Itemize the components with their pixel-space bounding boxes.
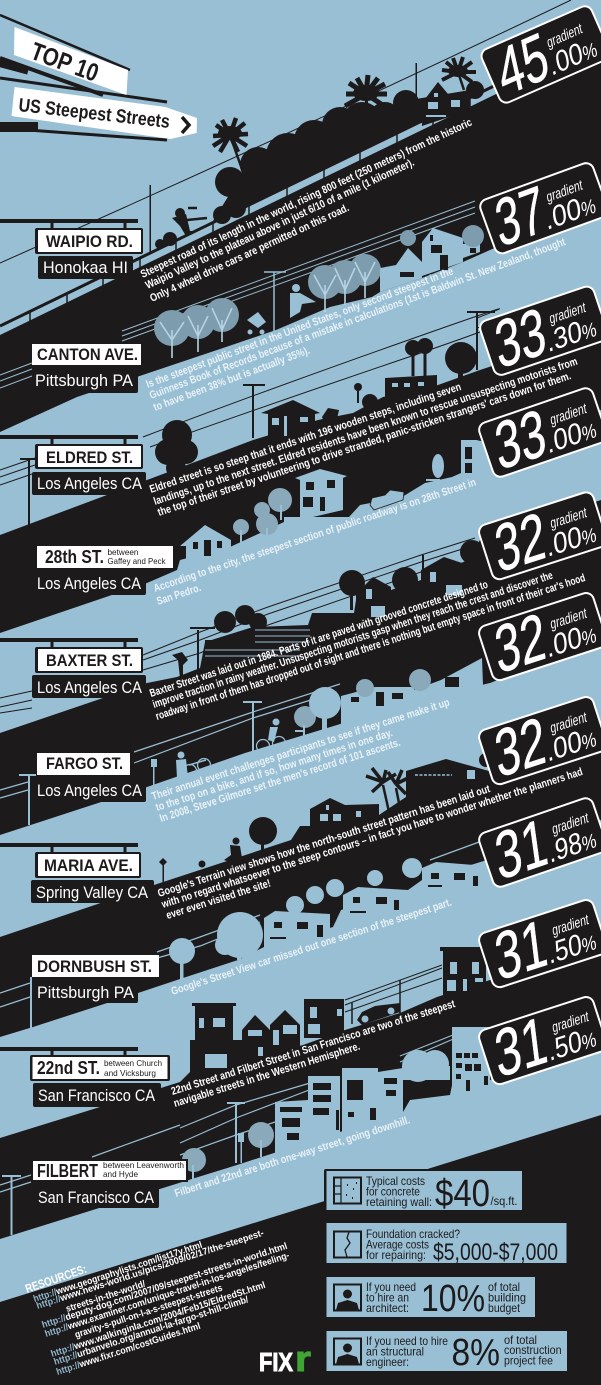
Dornbush house 2 <box>343 887 408 922</box>
panel: structural engineer fee: construction <box>504 1343 562 1357</box>
sign: Canton Ave: Pittsburgh PA <box>35 372 133 390</box>
sign: Eldred St: ELDRED ST. <box>46 449 133 467</box>
sign: Baxter St: BAXTER ST. <box>46 652 133 670</box>
text: Waipio description: Steepest road of its length in the world, rising 800 feet (250 meters) from the historic <box>139 117 474 281</box>
sign: Filbert: between Leavenworth <box>103 1160 184 1170</box>
text: Baxter description: Baxter Street was laid out in 1884. Parts of it are paved with grooved concrete designed to <box>148 579 490 700</box>
gradient badge 33.30%: .30 <box>545 315 584 359</box>
gradient badge 45.00%: .00 <box>546 37 586 83</box>
Canton trees, carriage, girl and houses in blue <box>154 225 484 358</box>
pickup car <box>370 490 404 510</box>
gradient badge 32.00% (Fargo): .00 <box>545 725 584 769</box>
panel: foundation repair cost: for repairing: <box>366 1248 426 1262</box>
sign: Filbert: San Francisco CA <box>38 1189 154 1207</box>
resources list: gravity-s-pull-on-l-a-s-steepest-streets <box>74 1283 224 1341</box>
panel: architect fee: If you need <box>366 1280 416 1294</box>
gradient badge 45.00%: gradient <box>546 21 584 52</box>
Dornbush house 1 <box>264 911 330 952</box>
gradient badge 32.00% (28th): 32 <box>491 498 549 587</box>
tall Victorian house at right <box>440 947 487 997</box>
walker with bike <box>176 752 210 778</box>
text: Canton description: to have been 38% but is actually 35%). <box>152 345 312 414</box>
sports car <box>357 1003 400 1025</box>
gabled house <box>242 1015 270 1062</box>
panel: architect fee: budget <box>488 1301 521 1315</box>
sign: 28th St: 28th ST. <box>45 547 104 567</box>
Waipio house <box>422 82 470 126</box>
panel: structural engineer fee: 8% <box>452 1332 500 1374</box>
text: Waipio description: Waipio Valley to the plateau above in just 6/10 of a mile (1 kilometer). <box>144 157 416 292</box>
sign: 28th St: Gaffey and Peck <box>108 556 166 566</box>
sign: 28th St: Los Angeles CA <box>37 575 141 593</box>
resources list: http://www.fixr.com/costGuides.html <box>55 1321 202 1378</box>
panel: foundation repair cost <box>326 1223 566 1266</box>
Filbert buildings <box>275 1068 403 1153</box>
palm tree middle <box>345 75 387 125</box>
Maria house right <box>406 759 491 805</box>
gradient badge 31.50% (22nd and Filbert): % <box>581 1029 598 1055</box>
right apartment block <box>452 1027 490 1091</box>
Fargo house <box>341 658 483 726</box>
Baxter house lower <box>356 577 391 630</box>
tree <box>249 817 277 852</box>
panel: architect fee: of total <box>488 1280 520 1294</box>
gradient badge 32.00% (Baxter): % <box>581 625 598 651</box>
sign: Canton Ave: CANTON AVE. <box>37 346 138 364</box>
sign: Maria Ave: MARIA AVE. <box>44 857 133 875</box>
Maria silhouettes: lamp, ball, kid, tree, houses and palms <box>159 753 493 885</box>
sign: Fargo St: Los Angeles CA <box>37 782 142 800</box>
gradient badge 32.00% (Baxter): gradient <box>550 605 588 633</box>
gradient badge 31.50% (22nd and Filbert) <box>474 986 601 1093</box>
gradient badge 33.00%: .00 <box>545 417 584 461</box>
resources list: http://www.examiner.com/unique-travel-in-los-angeles/feeling- <box>44 1250 291 1340</box>
lower trees <box>233 488 292 545</box>
icon: engineer <box>334 1338 361 1364</box>
palm tree left <box>213 118 250 192</box>
band: Waipio road and Canton hill <box>0 43 601 432</box>
panel: retaining wall cost: $40 <box>435 1173 490 1215</box>
text: 28th description: According to the city, the steepest section of public roadway is on 28th Street in <box>152 476 478 595</box>
baby carriage <box>247 312 266 334</box>
text: Maria description: Google's Terrain view shows how the north-south street pattern has been laid out <box>156 783 492 900</box>
gradient badge 33.30% <box>475 276 601 383</box>
resources list: http://www.news-world.us/pics/2009/02/17/the-steepest- <box>35 1228 265 1312</box>
Filbert wires, poles, trees and houses in blue <box>0 1027 490 1235</box>
gradient badge 31.98%: 31 <box>491 804 552 894</box>
Baxter silhouettes: trees, houses <box>172 540 484 678</box>
gradient badge 33.00%: 33 <box>491 395 550 484</box>
lollipop tree <box>354 383 362 403</box>
Dornbush house 3 <box>422 862 487 895</box>
band: bottom panel ground <box>0 1115 601 1385</box>
hiker <box>172 208 207 236</box>
panel: architect fee: building <box>488 1290 526 1304</box>
sign: Dornbush St: Pittsburgh PA <box>37 984 134 1002</box>
round tree group <box>215 90 419 206</box>
sign: 22nd St: between Church <box>104 1058 162 1068</box>
scalloped hedges <box>286 858 422 914</box>
sign: Fargo St <box>32 753 146 802</box>
gradient badge 31.98% <box>474 788 601 895</box>
Baxter house upper <box>421 557 468 604</box>
panel: structural engineer fee: engineer: <box>366 1355 409 1369</box>
gradient badge 32.00% (28th): gradient <box>550 505 588 532</box>
sign: 28th St: between <box>108 547 139 557</box>
sign: 22nd St: and Vicksburg <box>104 1068 156 1078</box>
Eldred silhouettes: trees, house, car, building, palms <box>155 338 477 478</box>
flat house <box>304 999 344 1038</box>
sign: Maria Ave: Spring Valley CA <box>36 884 148 902</box>
gradient badge 37.00%: % <box>580 195 597 222</box>
small tree and domed building <box>426 440 477 481</box>
gradient badge 32.00% (Fargo): % <box>581 729 598 755</box>
text: Canton description: Is the steepest public street in the United States, only second steepest in the <box>144 266 455 391</box>
sign: 22nd St: 22nd ST. <box>37 1058 100 1078</box>
gradient badge 33.00% <box>474 378 601 485</box>
sign: Waipio Rd: Honokaa HI <box>43 259 128 277</box>
sign: Canton Ave <box>32 344 141 393</box>
gradient badge 33.00%: gradient <box>549 401 588 429</box>
panel: retaining wall cost: /sq.ft. <box>490 1194 518 1208</box>
panel: foundation repair cost: $5,000-$7,000 <box>433 1239 558 1266</box>
gradient badge 31.98%: % <box>581 830 598 857</box>
stepped retaining wall <box>205 630 310 665</box>
panel: structural engineer fee: of total <box>504 1333 537 1347</box>
resources list: http://www.geographylists.com/list17y.html <box>32 1240 204 1305</box>
panel: foundation repair cost: Foundation cracked? <box>366 1227 460 1241</box>
gradient badge 31.50% (22nd and Filbert): .50 <box>546 1025 584 1068</box>
gradient badge 32.00% (28th): .00 <box>545 521 584 564</box>
sign: Baxter St: Los Angeles CA <box>37 679 142 697</box>
resources list: RESOURCES: <box>23 1262 88 1296</box>
gradient badge 32.00% (Fargo): 32 <box>491 703 549 792</box>
sign: Baxter St <box>0 638 146 698</box>
panel: architect fee: 10% <box>421 1278 485 1320</box>
text: 28th description <box>152 476 478 608</box>
gradient badge 31.50% (Dornbush): 31 <box>491 905 551 995</box>
panel: structural engineer fee <box>326 1331 567 1374</box>
Dornbush wires, trees and houses in blue <box>0 838 490 1028</box>
text: 22nd description: navigable streets in the Western Hemisphere. <box>172 1041 362 1110</box>
palm tree right <box>442 57 476 90</box>
22nd silhouettes: San Francisco houses and sports car <box>0 947 487 1108</box>
lacy tree left <box>154 298 239 358</box>
resources list: http://urbanvelo.org/annual-la-fargo-st-hill-climb/ <box>53 1294 250 1368</box>
gradient badge 33.30%: % <box>581 318 598 345</box>
sign: Eldred St: Los Angeles CA <box>37 475 142 493</box>
text: 22nd description: 22nd Street and Filbert Street in San Francisco are two of the steepest <box>170 998 457 1098</box>
band: Maria avenue <box>0 730 601 1037</box>
resources list <box>23 1228 291 1378</box>
text: Maria description: ever even visited the site! <box>165 877 272 922</box>
sign: Dornbush St: DORNBUSH ST. <box>37 958 152 976</box>
text: Eldred description: Eldred street is so steep that it ends with 196 wooden steps, including seven <box>148 381 463 496</box>
panel: architect fee: architect: <box>366 1301 409 1315</box>
palms <box>366 768 408 812</box>
panel: architect fee <box>326 1277 535 1320</box>
gradient badge 37.00%: .00 <box>543 192 584 237</box>
text: Waipio description: Only 4 wheel drive cars are permitted on this road. <box>148 202 351 305</box>
panel: structural engineer fee: an structural <box>366 1344 424 1358</box>
panel: architect fee: to hire an <box>366 1290 409 1304</box>
panel: structural engineer fee: project fee <box>504 1354 553 1368</box>
sign post <box>151 759 157 787</box>
lamp <box>159 858 167 885</box>
sign: Dornbush St <box>32 955 159 1003</box>
Eldred house <box>261 400 320 440</box>
Fargo wires, cyclists, sign, trees and house in blue <box>0 658 483 825</box>
Canton wires <box>0 201 475 388</box>
tree middle <box>215 912 263 960</box>
gradient badge 32.00% (Fargo): gradient <box>550 709 588 737</box>
shrubs on Waipio slope <box>155 198 246 249</box>
sign: Filbert: and Hyde <box>103 1169 138 1179</box>
logo: Fixr: FIX <box>259 1347 294 1377</box>
gradient badge 31.50% (Dornbush): .50 <box>546 928 584 971</box>
title signpost <box>0 15 197 140</box>
text: Fargo description: Their annual event challenges participants to see if they came make it up <box>150 697 451 803</box>
sign: Maria Ave <box>0 843 154 903</box>
gradient badge 32.00% (Fargo) <box>474 686 601 793</box>
gradient badge 32.00% (28th): % <box>581 524 598 551</box>
text: Filbert description: Filbert and 22nd are both one-way street, going downhill. <box>173 1114 412 1200</box>
gradient badge 31.50% (Dornbush) <box>474 889 601 996</box>
sign: Eldred St <box>0 435 146 495</box>
text: Dornbush description: Google's Street View car missed out one section of the steepest part. <box>170 897 453 998</box>
title signpost: US Steepest Streets <box>17 95 171 133</box>
band: Baxter street <box>0 500 601 835</box>
hedge tree at right <box>402 1050 450 1082</box>
Baxter wires and poles <box>0 538 475 713</box>
icon: architect <box>334 1284 361 1310</box>
palms <box>405 338 433 376</box>
Waipio hillside silhouette: trees, palms, hiker and house <box>0 0 571 263</box>
gradient badge 32.00% (Baxter): .00 <box>545 621 584 665</box>
roof building <box>385 375 437 400</box>
panel: retaining wall cost <box>324 1169 524 1215</box>
panel: retaining wall cost: for concrete <box>366 1184 420 1198</box>
text: 28th description: San Pedro. <box>155 582 203 608</box>
gabled house 2 <box>270 1010 300 1056</box>
gradient badge 33.30%: 33 <box>491 293 550 383</box>
band: Eldred street <box>0 330 601 633</box>
gradient badge 45.00% <box>476 0 601 111</box>
running kid <box>224 838 246 864</box>
resources list: http://deputy-dog.com/2007/09/steepest-streets-in-world.html <box>41 1241 289 1331</box>
gradient badge 31.50% (Dornbush): % <box>581 932 598 958</box>
text: Fargo description: to the top on a bike, and if so, how many times in one day. <box>154 727 394 814</box>
gradient badge 37.00%: 37 <box>490 171 549 261</box>
Eldred wires and poles <box>0 309 500 530</box>
logo: Fixr <box>259 1338 311 1379</box>
icon: cracked wall <box>334 1232 361 1258</box>
sign: Filbert: FILBERT <box>37 1161 98 1181</box>
text: Fargo description: In 2008, Steve Gilmore set the men's record of 101 ascents. <box>158 737 402 825</box>
gradient badge 45.00%: 45 <box>491 18 555 111</box>
22nd wires and pole <box>345 965 442 1024</box>
gradient badge 33.30%: gradient <box>549 300 587 328</box>
lacy tree and round tree <box>294 687 341 745</box>
sign: Waipio Rd: WAIPIO RD. <box>46 233 133 251</box>
gradient badge 31.50% (22nd and Filbert): 31 <box>491 1002 551 1092</box>
gradient badge 31.98%: .98 <box>546 827 584 870</box>
lacy tree right <box>308 254 381 312</box>
panel: foundation repair cost: Average costs <box>366 1238 429 1252</box>
sign: 22nd St: San Francisco CA <box>38 1087 155 1105</box>
car <box>322 408 339 425</box>
sign: Fargo St: FARGO ST. <box>46 755 123 773</box>
panel: structural engineer fee: If you need to hire <box>366 1334 448 1348</box>
text: 22nd description <box>170 998 457 1110</box>
sign: 28th St <box>32 546 173 595</box>
resources list: http://www.walkinginla.com/2004/Feb15/EldredSt.html <box>50 1280 267 1360</box>
logo: Fixr: r <box>295 1338 311 1379</box>
Eldred lower house <box>295 469 347 520</box>
gradient badge 33.00%: % <box>581 420 598 447</box>
cyclist <box>256 718 286 752</box>
gradient badge 37.00% <box>475 153 601 262</box>
28th and Eldred lower houses, trees and car in blue <box>180 440 477 566</box>
gradient badge 37.00%: gradient <box>545 177 584 206</box>
Maria house left <box>310 798 379 830</box>
sign: Waipio Rd <box>0 219 143 279</box>
panel: retaining wall cost: Typical costs <box>366 1174 425 1188</box>
Canton houses <box>380 228 480 292</box>
lacy trees <box>182 1122 274 1179</box>
sign post <box>238 1133 244 1163</box>
gradient badge 32.00% (Baxter) <box>474 582 601 689</box>
Victorian house <box>190 1003 242 1072</box>
band: 22nd street and Filbert <box>0 940 601 1239</box>
panel: retaining wall cost: retaining wall: <box>366 1195 432 1209</box>
gradient badge 32.00% (28th) <box>474 482 601 588</box>
big tree <box>445 342 477 382</box>
tree left <box>169 938 195 980</box>
title signpost: TOP 10 <box>27 37 102 88</box>
sign: 22nd St <box>0 1047 170 1107</box>
resources list: streets-in-the-world/ <box>65 1279 147 1315</box>
Waipio guard rail <box>0 86 494 326</box>
running girl <box>290 284 316 318</box>
28th house <box>180 525 231 566</box>
icon: concrete wall <box>334 1178 361 1204</box>
sign: Filbert <box>31 1159 188 1208</box>
gradient badge 32.00% (Baxter): 32 <box>491 599 549 688</box>
